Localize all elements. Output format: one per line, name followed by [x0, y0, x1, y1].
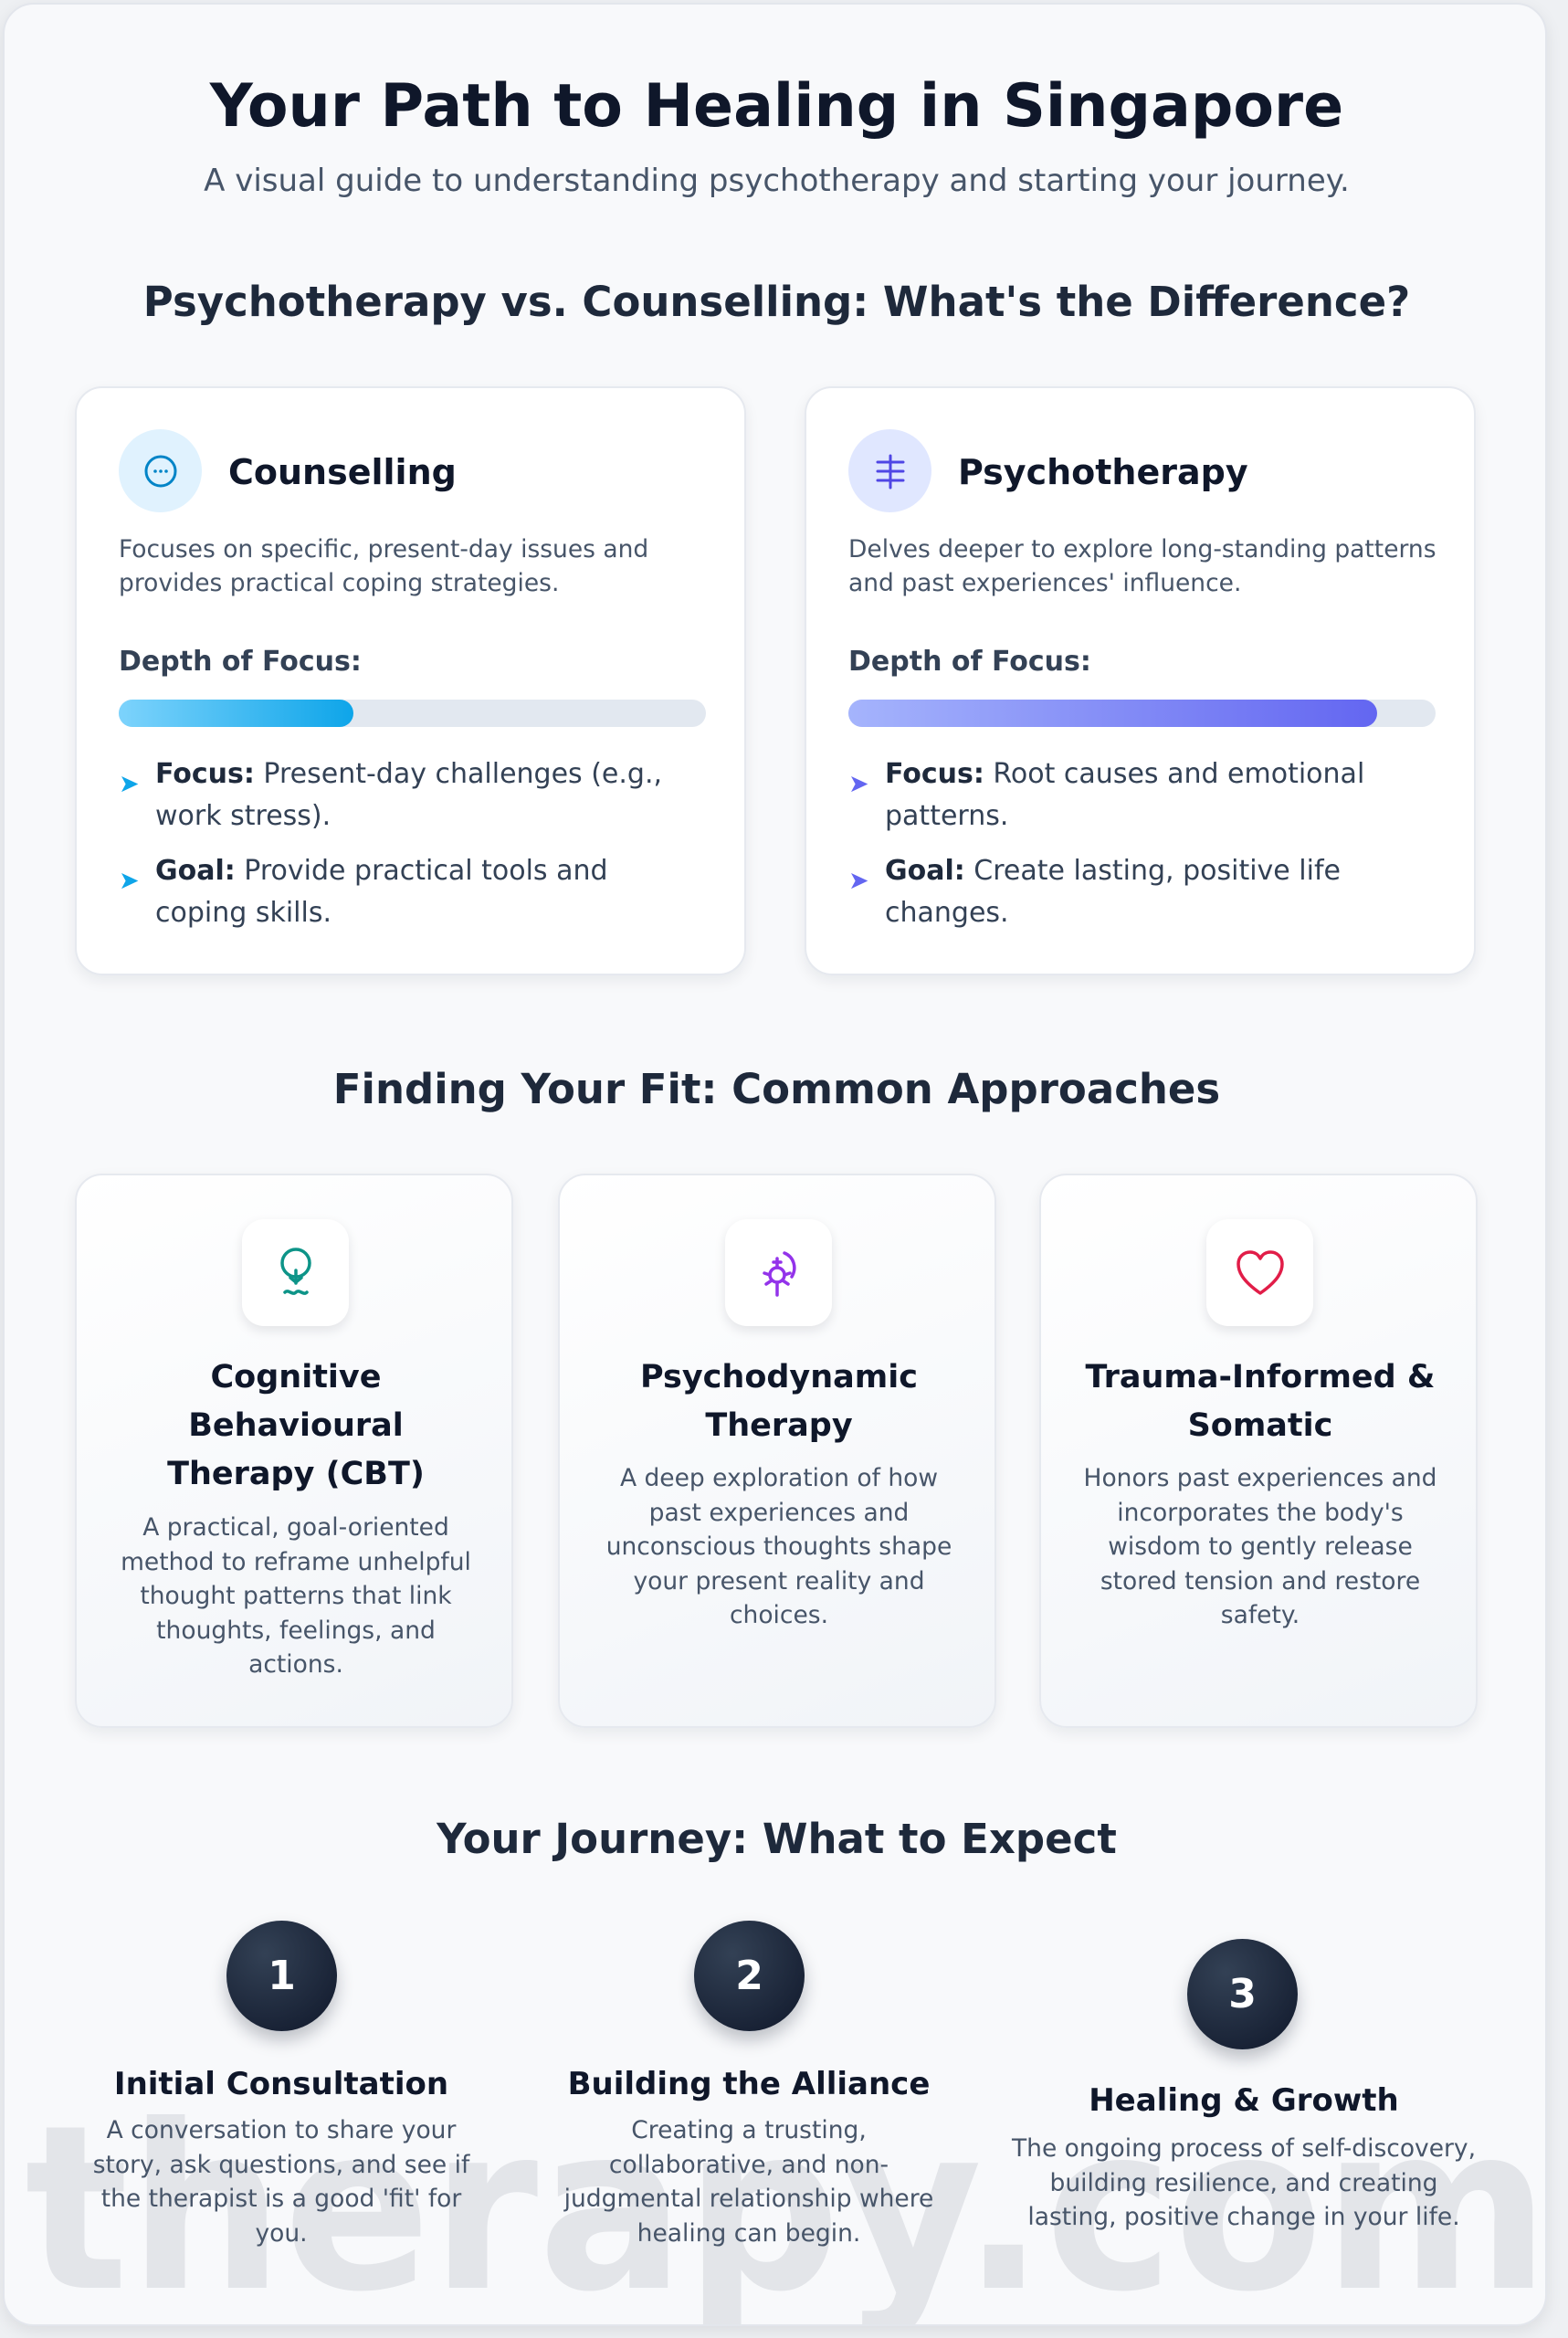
panel: counselling	[75, 386, 746, 975]
circle 3	[1187, 1939, 1298, 2049]
step text: Creating a trusting, collaborative, and non-judgmental relationship where healing can begin.	[564, 2116, 933, 2247]
circle 1	[226, 1921, 337, 2031]
panel: psychotherapy	[805, 386, 1476, 975]
circle 3: 3	[1228, 1971, 1257, 2017]
step title: Initial Consultation	[114, 2066, 448, 2102]
step 2	[563, 1921, 933, 2247]
title: Cognitive Behavioural Therapy (CBT)	[167, 1359, 425, 1492]
bullets: ➤	[119, 867, 140, 895]
bullets	[119, 758, 662, 929]
step text: A conversation to share your story, ask questions, and see if the therapist is a good 'fit' for you.	[93, 2116, 469, 2247]
icon: heart	[1206, 1219, 1313, 1326]
heading: journey: Your Journey: What to Expect	[437, 1815, 1117, 1863]
panel: psychodynamic	[558, 1174, 996, 1728]
description: A practical, goal-oriented method to reframe unhelpful thought patterns that link thoughts, feelings, and actions.	[121, 1513, 471, 1679]
step 3	[1012, 1939, 1476, 2231]
heading: difference: Psychotherapy vs. Counselling: What's the Difference?	[143, 278, 1410, 326]
subtitle: A visual guide to understanding psychotherapy and starting your journey.	[204, 163, 1350, 199]
icon: lightbulb head	[242, 1219, 349, 1326]
heading: approaches: Finding Your Fit: Common Approaches	[333, 1065, 1220, 1113]
bullets: Goal: Create lasting, positive life changes.	[885, 855, 1341, 929]
bullets: Focus: Root causes and emotional patterns.	[885, 758, 1364, 832]
step title: Building the Alliance	[568, 2066, 930, 2102]
description: A deep exploration of how past experiences and unconscious thoughts shape your present reality and choices.	[606, 1464, 952, 1629]
description: Focuses on specific, present-day issues and provides practical coping strategies.	[119, 535, 648, 597]
title: Your Path to Healing in Singapore	[210, 72, 1343, 141]
step title: Healing & Growth	[1089, 2082, 1399, 2119]
circle 1: 1	[268, 1953, 296, 1999]
bullets	[848, 758, 1364, 929]
title: Psychodynamic Therapy	[640, 1359, 918, 1444]
description: Honors past experiences and incorporates the body's wisdom to gently release stored tension and restore safety.	[1084, 1464, 1436, 1629]
panel: trauma	[1039, 1174, 1478, 1728]
depth label: Depth of Focus:	[848, 646, 1091, 678]
step 1	[93, 1921, 470, 2247]
circle 2: 2	[735, 1953, 763, 1999]
depth bar	[119, 700, 706, 727]
bullets: Goal: Provide practical tools and coping skills.	[155, 855, 608, 929]
depth bar	[848, 700, 1436, 727]
icon: chat bubble	[119, 429, 202, 512]
title: Trauma-Informed & Somatic	[1086, 1359, 1435, 1444]
icon: layers	[848, 429, 931, 512]
panel: CBT	[75, 1174, 513, 1728]
step text: The ongoing process of self-discovery, building resilience, and creating lasting, positive change in your life.	[1012, 2134, 1476, 2231]
bullets: Focus: Present-day challenges (e.g., work stress).	[155, 758, 662, 832]
bullets: ➤	[848, 770, 869, 798]
circle 2	[694, 1921, 805, 2031]
description: Delves deeper to explore long-standing patterns and past experiences' influence.	[848, 535, 1436, 597]
card title: Counselling	[228, 452, 457, 492]
bullets: ➤	[848, 867, 869, 895]
bullets: ➤	[119, 770, 140, 798]
card title: Psychotherapy	[958, 452, 1248, 492]
icon: psyche	[725, 1219, 832, 1326]
depth label: Depth of Focus:	[119, 646, 362, 678]
